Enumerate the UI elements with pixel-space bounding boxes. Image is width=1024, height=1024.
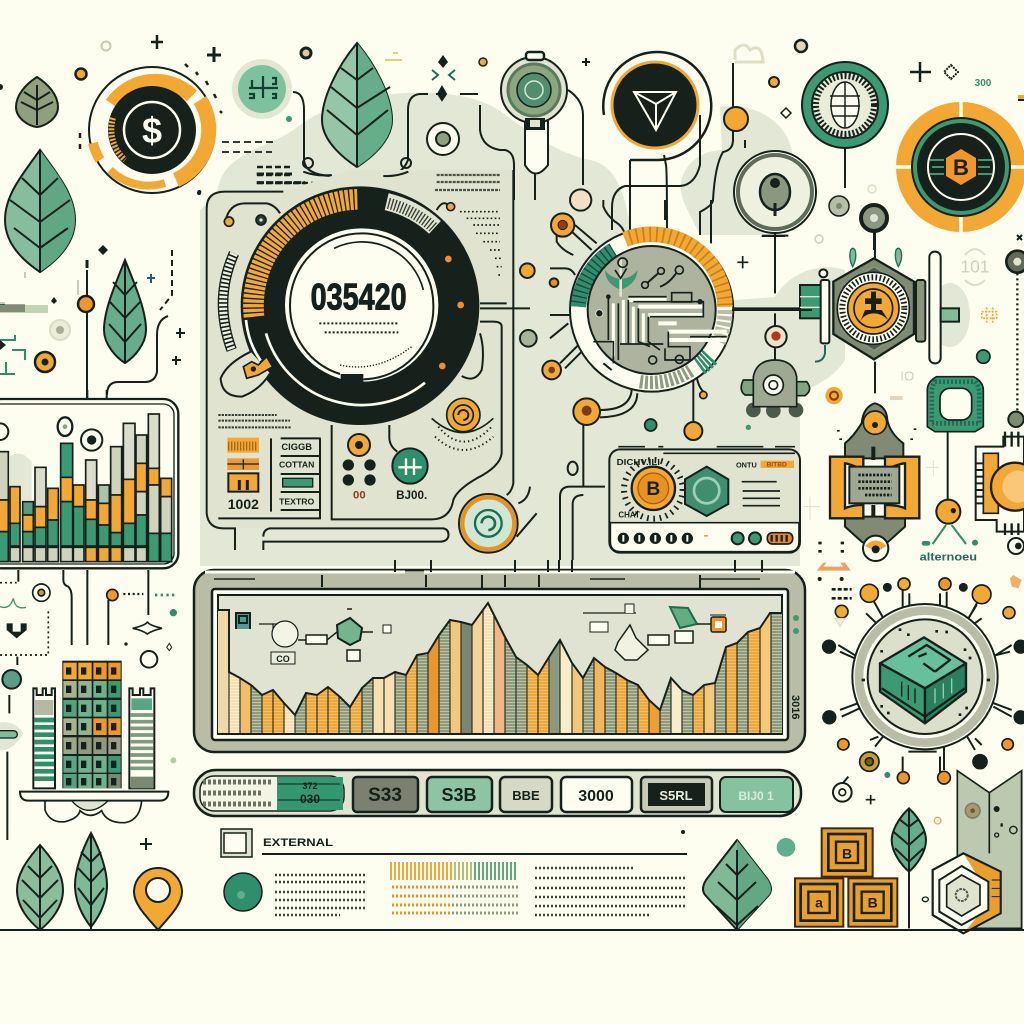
- icon: map pin: [134, 838, 182, 930]
- building: right tower: [129, 688, 154, 788]
- dotted line with nodes: [1006, 251, 1024, 554]
- icon: green badge: [232, 59, 292, 119]
- donut gauge: [241, 186, 479, 425]
- table: COTTAN: [279, 460, 314, 470]
- chart rings: [0, 417, 102, 451]
- spiral badge: [432, 398, 493, 450]
- stacked boxes: B: [842, 845, 852, 861]
- gray flag: [957, 771, 1022, 928]
- chip traces: [593, 266, 727, 364]
- leaf: bottom left B: [75, 833, 107, 930]
- cell: dark: S33: [368, 785, 402, 806]
- main panel: [197, 170, 537, 553]
- rotated side label: 3016: [789, 695, 801, 719]
- panel frame: [194, 570, 805, 752]
- spiral ring node: [459, 494, 518, 553]
- readout number: 035420: [311, 275, 407, 317]
- right circuit: [975, 432, 1024, 535]
- cell: white: 3000: [578, 788, 614, 805]
- bar chart: [0, 414, 172, 562]
- data cells: 030: [300, 792, 320, 806]
- cell: gray: [500, 777, 552, 812]
- green disk and pill: [0, 670, 23, 751]
- card bottom controls: [618, 532, 793, 544]
- stacked boxes: B: [868, 895, 878, 911]
- control bar: [194, 770, 801, 816]
- legend block: [221, 829, 687, 915]
- hex in card: [685, 467, 728, 516]
- chart area: [218, 595, 782, 734]
- orange ball with legs: [920, 500, 978, 564]
- building: left tower: [33, 688, 55, 788]
- cell: dark: [353, 777, 418, 812]
- divider: [268, 438, 274, 512]
- leaf: bottom center: [703, 840, 771, 930]
- info card: ONTU: [736, 460, 757, 469]
- chip badge: [570, 228, 733, 392]
- top highlight and connectors: [205, 560, 795, 597]
- info card: [609, 447, 800, 553]
- spokes: [838, 590, 1012, 773]
- orange nodes: [542, 189, 748, 475]
- coin in card: [624, 460, 683, 519]
- panel: body outline: [207, 170, 513, 528]
- gauge: [734, 151, 816, 236]
- top center node: [479, 52, 590, 200]
- small panel nodes: [197, 190, 537, 347]
- light numerals: [815, 235, 989, 400]
- coin inner: [638, 473, 669, 504]
- orange mini chart: [227, 438, 259, 512]
- data cells: 372: [302, 781, 318, 791]
- key tag: [221, 352, 273, 397]
- bar base row: [10, 547, 147, 562]
- big chart panel: [194, 560, 805, 752]
- legend dot: [681, 830, 685, 834]
- tick band left: [223, 253, 234, 350]
- connector lines above the main panel: [293, 87, 478, 176]
- stacked boxes: [795, 828, 897, 927]
- leaf: small top left: [16, 77, 58, 127]
- text rows right: [535, 868, 687, 915]
- hex chip: [833, 258, 914, 359]
- left chart panel: [0, 390, 178, 840]
- table: [279, 438, 321, 510]
- chip region: [542, 189, 810, 560]
- green ring: [927, 377, 983, 500]
- info card: BITBD: [766, 462, 787, 469]
- data cells: [203, 777, 343, 810]
- coin: large B: B: [953, 155, 969, 180]
- orange node and dashes: [107, 589, 177, 763]
- coin: dollar top left: [89, 67, 215, 193]
- info card: DICHV.ILI: [617, 457, 660, 467]
- cell: black: [641, 777, 712, 812]
- connector lines: [7, 390, 148, 840]
- light numerals: 101: [961, 257, 989, 277]
- dashes top of panel: [257, 174, 502, 275]
- device: [741, 360, 810, 430]
- connector lines: [550, 200, 803, 560]
- legend dashes: [218, 415, 292, 427]
- leaf: bottom left A: [17, 845, 63, 930]
- panel frame: [0, 399, 178, 568]
- control dots: 00: [353, 490, 366, 502]
- text rows left: [275, 875, 365, 915]
- green circle: [224, 873, 262, 911]
- faint backdrop arc: [10, 453, 32, 500]
- cell: black: S5RL: [659, 788, 693, 803]
- satellite balls: [823, 578, 1024, 784]
- building: center tower: [62, 661, 122, 788]
- orange mini chart: 1002: [228, 496, 259, 512]
- side plates: [800, 248, 959, 363]
- right cluster: [800, 230, 1024, 564]
- node: orange connector: [612, 40, 807, 235]
- small marks: [818, 575, 1022, 824]
- hex center: [694, 478, 719, 503]
- shield device: [830, 403, 919, 561]
- skyline bars: [218, 600, 782, 733]
- cell: green: S3B: [441, 785, 477, 805]
- leaf: narrow left: [104, 260, 146, 363]
- building: tray: [20, 792, 168, 823]
- chip rings: [852, 604, 998, 749]
- cell: mint: [720, 777, 793, 812]
- radial chip: [777, 563, 1024, 933]
- left fragments: [0, 84, 185, 398]
- coin: black with gem: [603, 52, 711, 230]
- leaf: right small: [892, 808, 926, 928]
- leaf: top center: [322, 43, 392, 167]
- legend square: [221, 829, 252, 857]
- legend rule: [262, 853, 687, 855]
- chart annotations left: [236, 609, 391, 664]
- green badge: [392, 448, 428, 502]
- globe badge: [802, 62, 888, 250]
- node: red center: [765, 326, 787, 347]
- top right marks: [910, 62, 1024, 100]
- skyline outline: [218, 603, 782, 715]
- legend title: EXTERNAL: [263, 837, 333, 849]
- stacked boxes: a: [815, 895, 823, 911]
- control dots: [343, 434, 376, 502]
- readout caption dashes: [319, 323, 398, 332]
- light numerals: IO: [900, 369, 914, 384]
- leaf: large left: [5, 150, 75, 272]
- mini marks: [803, 307, 997, 553]
- panel: outline strokes: [207, 170, 537, 550]
- hex stem: [872, 230, 878, 393]
- chart annotations right: [583, 604, 799, 660]
- cell: mint: BIJ0 1: [738, 789, 774, 803]
- bar frame: [194, 770, 801, 816]
- circle: green dot: [777, 838, 795, 857]
- color stripes: [391, 862, 518, 913]
- inner frame: [212, 589, 788, 740]
- sage background blobs: [200, 93, 970, 566]
- coin glyph: B: [646, 479, 660, 500]
- hex badge: [922, 853, 1001, 933]
- left gate of right cluster: connector: [732, 309, 812, 311]
- table: TEXTRO: [279, 496, 314, 506]
- green badge: BJ00.: [396, 489, 427, 502]
- coin: large B: [896, 102, 1024, 240]
- top right marks: 300: [975, 78, 992, 89]
- cell: gray: BBE: [512, 788, 540, 803]
- orange arrow mark: [817, 563, 851, 571]
- orange ball with legs: alternoeu: [920, 552, 977, 564]
- dashed node box: [0, 583, 50, 655]
- small decorative marks top left: [76, 35, 455, 195]
- cell: green: [427, 777, 492, 812]
- baseline: [0, 929, 1024, 931]
- bar inner left: [200, 776, 344, 811]
- panel inner stroke: [0, 404, 174, 564]
- green block: [880, 637, 966, 723]
- coin face: [632, 467, 675, 510]
- chart annotations left: CO: [276, 654, 290, 664]
- cell: white: [561, 777, 632, 812]
- table: CIGGB: [281, 442, 312, 452]
- coin: dollar top left: $: [142, 110, 162, 151]
- info card: CHAT: [618, 510, 640, 519]
